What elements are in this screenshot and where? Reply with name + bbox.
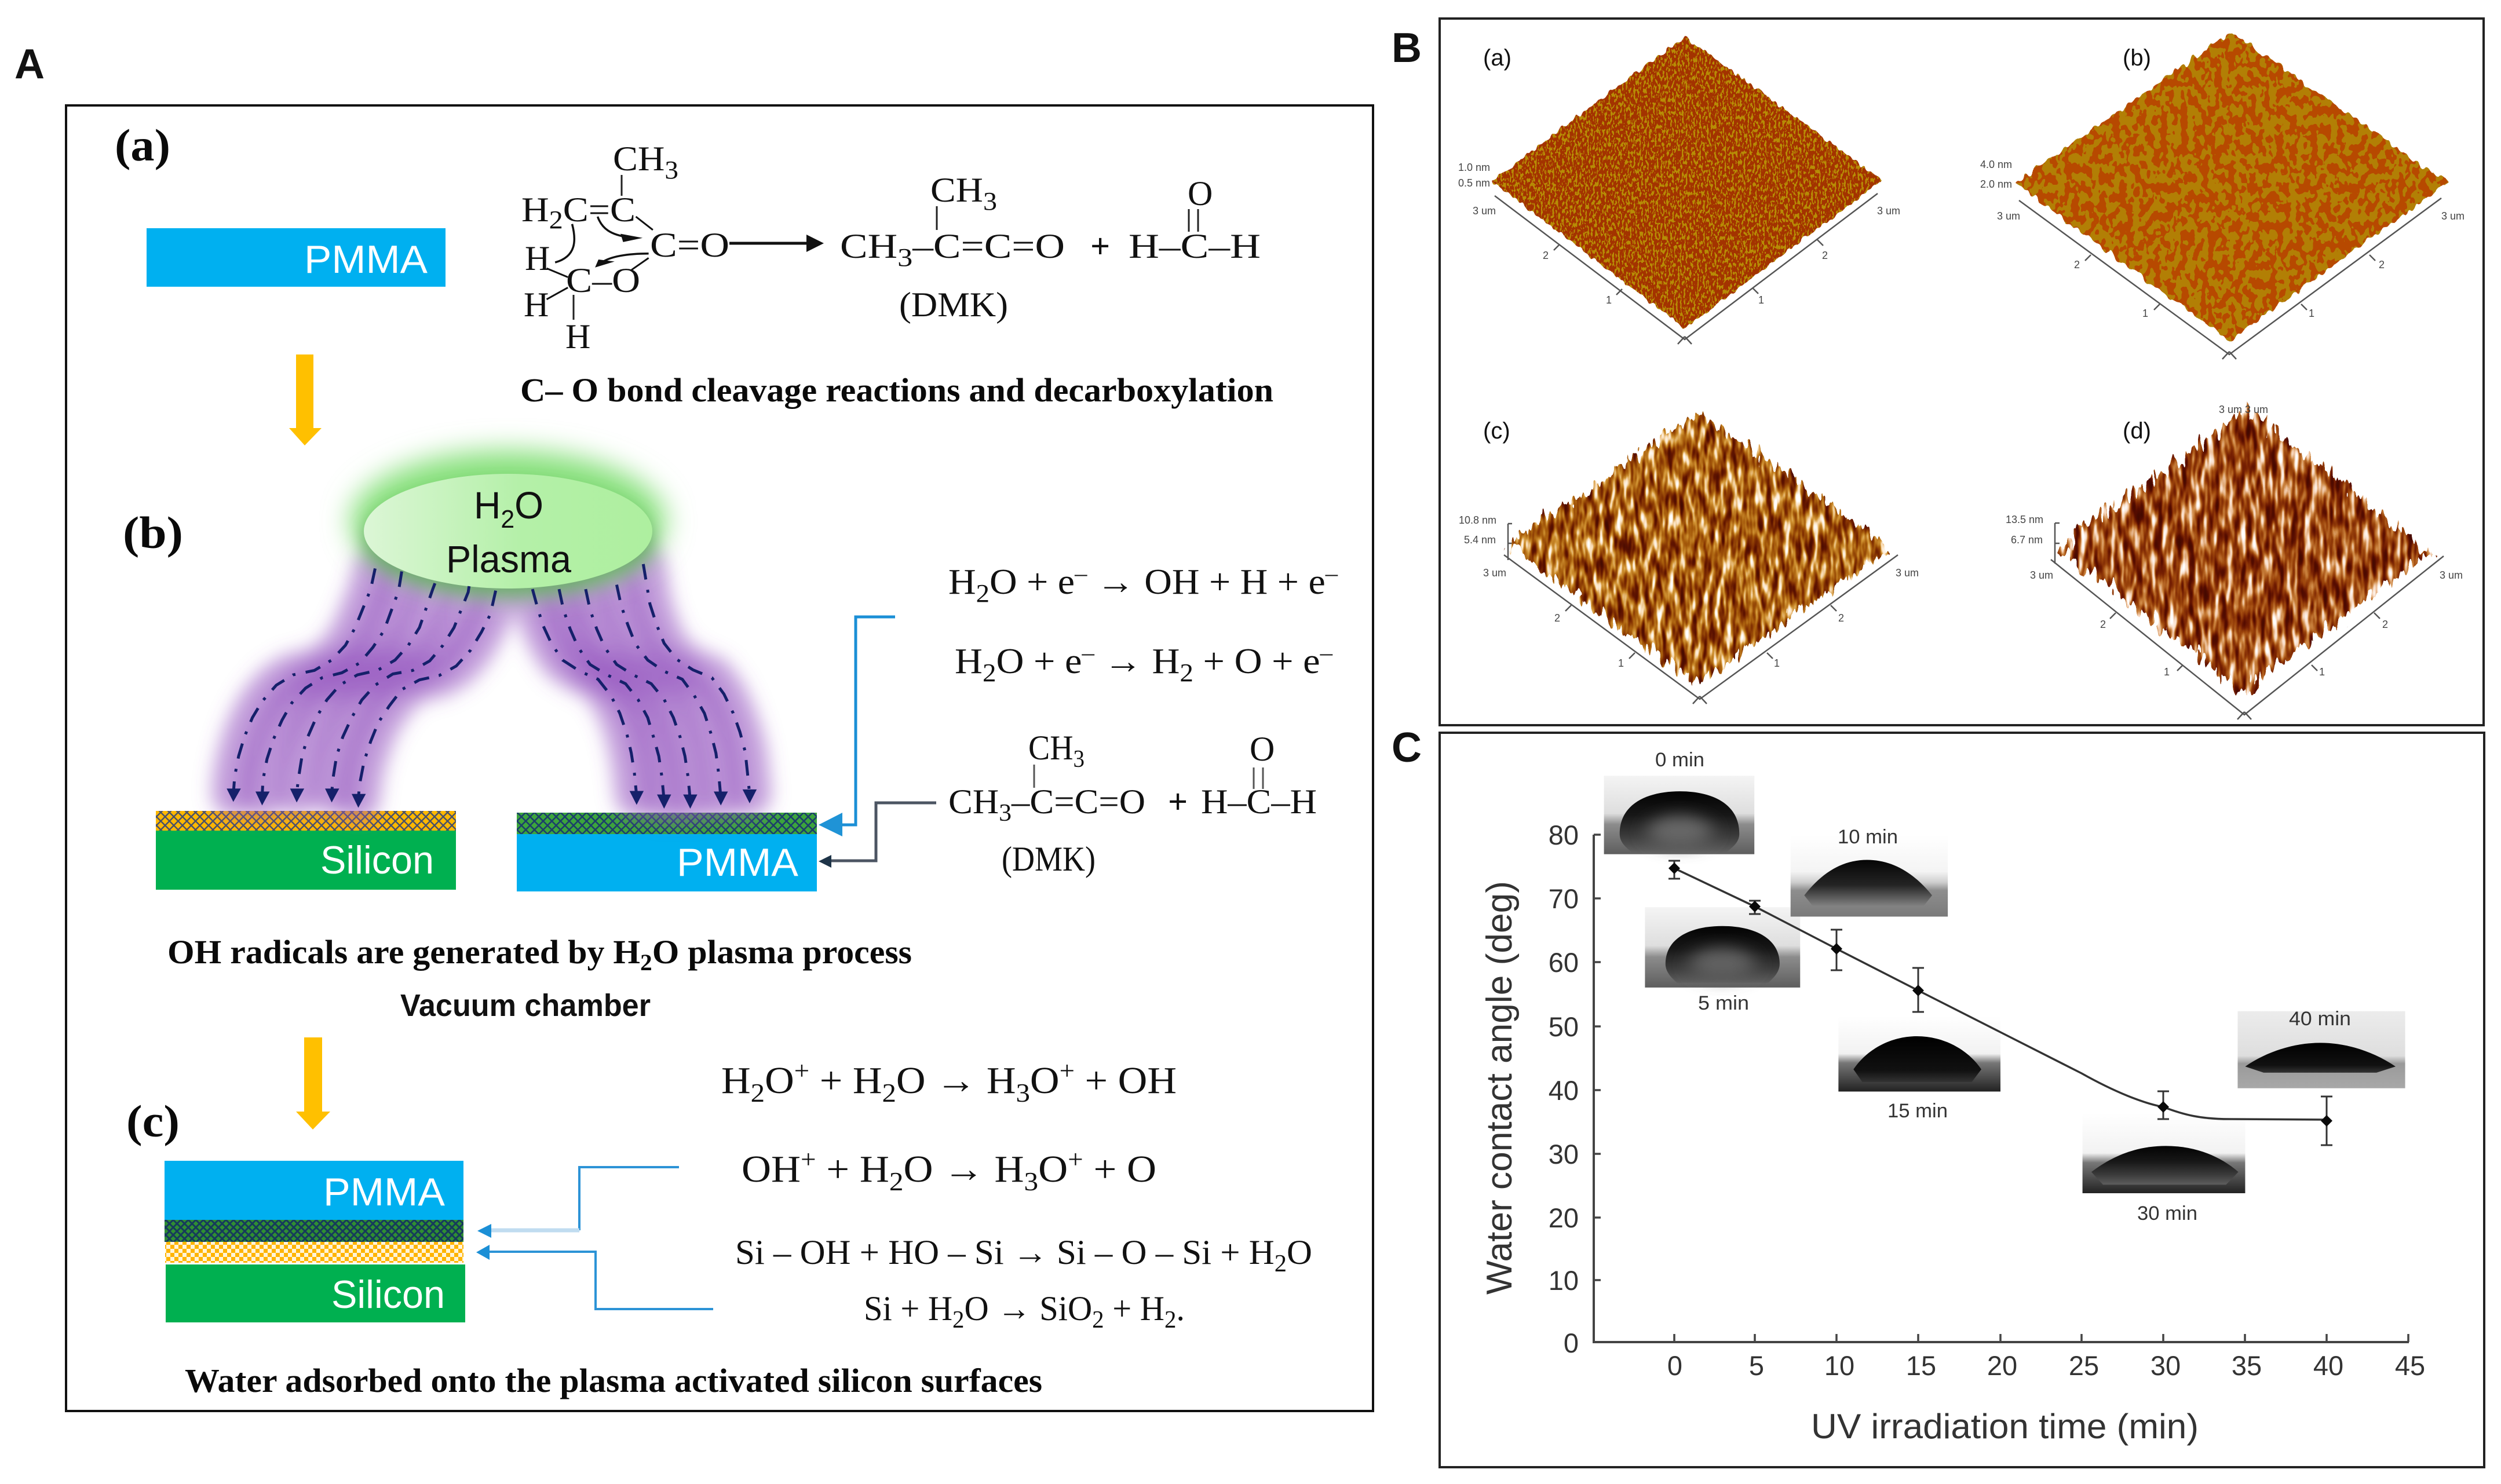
AFM image (b): 2 bbox=[2074, 259, 2080, 271]
reactant structure: C=C bbox=[563, 191, 636, 229]
reactant structure: C=O bbox=[650, 226, 729, 264]
product structure: DMK and formaldehyde bbox=[840, 171, 1261, 324]
equations: water dissociation: – bbox=[1325, 560, 1338, 586]
AFM image (b): 3 um bbox=[1997, 210, 2020, 222]
y-axis tick labels: 20 bbox=[1549, 1202, 1579, 1233]
panel A: PMMA plasma process bbox=[66, 105, 1373, 1411]
chart axes bbox=[1594, 835, 2409, 1342]
y-axis tick labels: 50 bbox=[1549, 1011, 1579, 1042]
AFM image (c) bbox=[1459, 412, 1919, 704]
panel B: AFM surfaces bbox=[1440, 19, 2484, 725]
equations: interface reactions: + bbox=[794, 1057, 809, 1085]
reactant structure: H bbox=[565, 317, 590, 356]
caption: water adsorption: Water adsorbed onto the plasma activated silicon surfaces bbox=[185, 1362, 1042, 1399]
y-axis tick labels: 40 bbox=[1549, 1075, 1579, 1106]
equations: water dissociation: H bbox=[948, 562, 974, 602]
AFM image (a): 3 um bbox=[1877, 205, 1900, 217]
x-axis tick labels: 35 bbox=[2232, 1350, 2262, 1381]
droplet time labels: 15 min bbox=[1887, 1100, 1948, 1122]
equations: interface reactions: O → SiO bbox=[964, 1289, 1092, 1328]
caption: OH radicals: OH radicals are generated by H bbox=[167, 933, 625, 971]
error bars bbox=[1668, 861, 2332, 1145]
equations: interface reactions: + bbox=[801, 1145, 816, 1174]
equations: water dissociation: – bbox=[1074, 560, 1087, 586]
equations: interface reactions: + H bbox=[1104, 1289, 1164, 1328]
AFM image (d): (d) bbox=[2123, 418, 2151, 444]
equations: interface reactions: 2 bbox=[889, 1167, 903, 1196]
reaction arrow bbox=[729, 235, 824, 252]
product structure: DMK and formaldehyde: CH bbox=[840, 227, 888, 265]
AFM image (b): 2 bbox=[2379, 259, 2385, 271]
equations: interface reactions: O → H bbox=[903, 1148, 1024, 1190]
x-axis title: UV irradiation time (min) bbox=[1811, 1407, 2199, 1446]
product structure: DMK and formaldehyde: 3 bbox=[983, 187, 997, 215]
arrow: connector to silicon interface bbox=[476, 1245, 713, 1309]
y-axis tick labels bbox=[1549, 820, 1579, 1358]
data curve bbox=[1674, 868, 2327, 1120]
caption: bond cleavage: C– O bond cleavage reactions and decarboxylation bbox=[520, 371, 1273, 409]
DMK structure, step b: 3 bbox=[999, 800, 1012, 827]
DMK structure, step b: –C=C=O bbox=[1011, 783, 1145, 821]
equations: interface reactions: 3 bbox=[1024, 1167, 1038, 1196]
arrow: connector to PMMA interface bbox=[477, 1167, 679, 1238]
AFM image (a): 2 bbox=[1822, 250, 1828, 261]
AFM image (d): 1 bbox=[2319, 666, 2325, 678]
AFM image (b): 4.0 nm bbox=[1980, 159, 2012, 170]
panel A label: A bbox=[14, 41, 45, 87]
equations: interface reactions: O bbox=[1030, 1059, 1060, 1102]
caption: OH radicals: 2 bbox=[640, 949, 652, 975]
arrow: blue connector to PMMA surface bbox=[819, 617, 895, 836]
arrow: step b to c bbox=[296, 1037, 330, 1130]
x-axis tick labels: 45 bbox=[2395, 1350, 2425, 1381]
equations: interface reactions: OH bbox=[742, 1148, 797, 1190]
AFM image (b): 3 um bbox=[2441, 210, 2465, 222]
droplet time labels: 0 min bbox=[1655, 749, 1704, 771]
panel A frame bbox=[66, 105, 1373, 1411]
droplet time labels bbox=[1655, 749, 2351, 1225]
y-axis tick labels: 10 bbox=[1549, 1265, 1579, 1296]
step (a) label: (a) bbox=[115, 120, 170, 170]
caption: vacuum chamber: Vacuum chamber bbox=[400, 988, 651, 1023]
panel B label: B bbox=[1392, 25, 1422, 71]
AFM image (c): 3 um bbox=[1896, 567, 1919, 579]
AFM image (a): 2 bbox=[1543, 250, 1549, 261]
equations: water dissociation: 2 bbox=[976, 579, 990, 608]
plasma ellipse with H2O label: H bbox=[474, 484, 502, 527]
equations: interface reactions: . bbox=[1176, 1289, 1185, 1328]
droplet time labels: 10 min bbox=[1838, 826, 1898, 848]
step (b) label: (b) bbox=[123, 507, 183, 558]
equations: water dissociation: + O + e bbox=[1193, 642, 1320, 681]
equations: interface reactions: Si – OH + HO – Si → Si – O – Si + H bbox=[735, 1233, 1267, 1271]
PMMA stack with hatched layer bbox=[517, 813, 817, 891]
plasma ellipse with H2O label bbox=[350, 451, 666, 595]
AFM image (b): 1 bbox=[2309, 308, 2314, 319]
droplet time labels: 30 min bbox=[2137, 1202, 2197, 1225]
equations: interface reactions: 2 bbox=[952, 1307, 964, 1333]
AFM image (a): 3 um bbox=[1473, 205, 1496, 217]
product structure: DMK and formaldehyde: 3 bbox=[897, 243, 912, 272]
PMMA stack with hatched layer: PMMA bbox=[677, 840, 799, 884]
AFM image (c): 1 bbox=[1618, 657, 1624, 669]
panel C label: C bbox=[1392, 725, 1422, 771]
step (c) label: (c) bbox=[126, 1096, 180, 1146]
DMK structure, step b: O bbox=[1250, 730, 1275, 768]
equations: interface reactions: 3 bbox=[1016, 1078, 1030, 1107]
bonded stack: PMMA on silicon bbox=[165, 1161, 465, 1322]
product structure: DMK and formaldehyde: + bbox=[1090, 227, 1110, 265]
y-axis tick labels: 70 bbox=[1549, 883, 1579, 914]
AFM image (c): 5.4 nm bbox=[1464, 534, 1496, 546]
AFM image (c): 3 um bbox=[1483, 567, 1506, 579]
data markers bbox=[1668, 862, 2332, 1127]
dash-dot radical flow arrows bbox=[227, 564, 757, 809]
equations: interface reactions: + H bbox=[809, 1059, 882, 1102]
x-axis tick labels: 15 bbox=[1906, 1350, 1936, 1381]
PMMA block, step a: PMMA bbox=[304, 237, 428, 282]
x-axis tick labels: 10 bbox=[1824, 1350, 1854, 1381]
arrow: step a to b bbox=[289, 354, 322, 445]
equations: water dissociation: O + e bbox=[990, 562, 1075, 602]
silicon stack with hatched layer bbox=[156, 811, 456, 890]
x-axis tick labels: 40 bbox=[2313, 1350, 2343, 1381]
equations: interface reactions: 2 bbox=[751, 1078, 765, 1107]
equations: interface reactions: H bbox=[721, 1059, 749, 1102]
reactant structure: CH bbox=[613, 140, 661, 178]
AFM image (b): (b) bbox=[2123, 45, 2151, 71]
x-axis tick labels: 30 bbox=[2151, 1350, 2181, 1381]
x-axis tick labels: 20 bbox=[1987, 1350, 2017, 1381]
AFM image (c): 10.8 nm bbox=[1459, 514, 1496, 526]
equations: interface reactions: + bbox=[1068, 1145, 1083, 1174]
AFM image (c): 1 bbox=[1774, 657, 1780, 669]
AFM image (d): 3 um bbox=[2440, 569, 2463, 581]
equations: interface reactions: O bbox=[765, 1059, 794, 1102]
equations: water dissociation: 2 bbox=[1180, 659, 1193, 687]
plasma ellipse with H2O label: 2 bbox=[501, 505, 514, 533]
caption: OH radicals: O plasma process bbox=[652, 933, 912, 971]
AFM image (c): 2 bbox=[1554, 612, 1560, 624]
product structure: DMK and formaldehyde: –C=C=O bbox=[912, 227, 1065, 265]
AFM image (d): 6.7 nm bbox=[2011, 534, 2043, 546]
equations: water dissociation bbox=[948, 560, 1338, 687]
product structure: DMK and formaldehyde: (DMK) bbox=[899, 286, 1008, 324]
plasma ellipse with H2O label: Plasma bbox=[446, 538, 571, 580]
equations: interface reactions: 2 bbox=[1164, 1307, 1176, 1333]
reactant structure: C–O bbox=[566, 261, 640, 299]
AFM image (b) bbox=[1980, 32, 2465, 359]
DMK structure, step b: (DMK) bbox=[1002, 840, 1096, 878]
y-axis tick labels: 0 bbox=[1564, 1328, 1579, 1358]
bonded stack: PMMA on silicon: Silicon bbox=[331, 1273, 445, 1317]
x-axis tick labels bbox=[1667, 1350, 2425, 1381]
AFM image (b): 2.0 nm bbox=[1980, 178, 2012, 190]
equations: interface reactions: 2 bbox=[1275, 1251, 1287, 1277]
y-axis title: Water contact angle (deg) bbox=[1480, 881, 1520, 1295]
equations: interface reactions bbox=[721, 1057, 1312, 1333]
equations: interface reactions: O bbox=[1038, 1148, 1068, 1190]
PMMA block, step a bbox=[147, 228, 446, 287]
equations: water dissociation: – bbox=[1320, 639, 1333, 666]
DMK structure, step b: 3 bbox=[1073, 746, 1085, 773]
equations: interface reactions: + OH bbox=[1075, 1059, 1177, 1102]
product structure: DMK and formaldehyde: H–C–H bbox=[1129, 227, 1261, 265]
AFM image (c): (c) bbox=[1483, 418, 1510, 444]
AFM image (a): (a) bbox=[1483, 45, 1511, 71]
arrow: dark connector from DMK bbox=[819, 803, 936, 868]
AFM image (d): 1 bbox=[2164, 666, 2170, 678]
equations: interface reactions: + H bbox=[816, 1148, 889, 1190]
panel C: water contact angle chart bbox=[1440, 733, 2484, 1467]
AFM image (d): 3 um 3 um bbox=[2219, 404, 2268, 415]
AFM image (d) bbox=[2006, 404, 2463, 719]
equations: water dissociation: H bbox=[955, 642, 981, 681]
equations: water dissociation: → OH + H + e bbox=[1087, 562, 1326, 602]
DMK structure, step b: H–C–H bbox=[1201, 783, 1317, 821]
reactant structure: 2 bbox=[549, 206, 563, 234]
x-axis tick labels: 0 bbox=[1667, 1350, 1682, 1381]
AFM image (a): 1 bbox=[1758, 294, 1764, 306]
plasma purple streams glow bbox=[233, 564, 750, 801]
droplet photos bbox=[1604, 776, 2405, 1193]
droplet time labels: 5 min bbox=[1698, 992, 1749, 1014]
DMK structure, step b: + bbox=[1168, 783, 1188, 821]
AFM image (a): 0.5 nm bbox=[1458, 177, 1490, 189]
bonded stack: PMMA on silicon: PMMA bbox=[323, 1170, 446, 1214]
equations: water dissociation: → H bbox=[1094, 642, 1180, 681]
equations: water dissociation: – bbox=[1081, 639, 1095, 666]
AFM image (d): 13.5 nm bbox=[2006, 514, 2043, 525]
equations: interface reactions: O bbox=[1287, 1233, 1312, 1271]
silicon stack with hatched layer: Silicon bbox=[320, 838, 434, 882]
y-axis tick labels: 60 bbox=[1549, 947, 1579, 978]
equations: interface reactions: 2 bbox=[882, 1078, 896, 1107]
product structure: DMK and formaldehyde: CH bbox=[930, 171, 979, 209]
y-axis tick labels: 80 bbox=[1549, 820, 1579, 850]
reactant structure: H bbox=[524, 286, 549, 324]
AFM image (a): 1 bbox=[1606, 294, 1612, 306]
equations: interface reactions: + bbox=[1060, 1057, 1075, 1085]
reactant structure: 3 bbox=[665, 156, 678, 184]
DMK structure, step b bbox=[948, 729, 1317, 878]
x-axis tick labels: 5 bbox=[1749, 1350, 1764, 1381]
AFM image (b): 1 bbox=[2142, 308, 2148, 319]
equations: water dissociation: O + e bbox=[996, 642, 1082, 681]
AFM image (d): 2 bbox=[2100, 619, 2106, 630]
equations: interface reactions: Si + H bbox=[864, 1289, 955, 1328]
droplet time labels: 40 min bbox=[2289, 1008, 2351, 1030]
reactant structure: H bbox=[521, 191, 546, 229]
equations: interface reactions: + O bbox=[1083, 1148, 1156, 1190]
AFM image (d): 2 bbox=[2382, 619, 2388, 630]
equations: interface reactions: O → H bbox=[896, 1059, 1016, 1102]
equations: water dissociation: 2 bbox=[983, 659, 996, 687]
AFM image (c): 2 bbox=[1838, 612, 1844, 624]
AFM image (d): 3 um bbox=[2030, 569, 2053, 581]
y-axis tick labels: 30 bbox=[1549, 1139, 1579, 1169]
equations: interface reactions: 2 bbox=[1092, 1307, 1104, 1333]
AFM image (a) bbox=[1458, 36, 1900, 344]
plasma ellipse with H2O label: O bbox=[514, 484, 543, 527]
panel B frame bbox=[1440, 19, 2484, 725]
panel C frame bbox=[1440, 733, 2484, 1467]
reactant structure: H bbox=[525, 239, 550, 277]
reactant structure bbox=[521, 140, 729, 356]
DMK structure, step b: CH bbox=[1028, 729, 1076, 767]
AFM image (a): 1.0 nm bbox=[1458, 162, 1490, 173]
DMK structure, step b: CH bbox=[948, 783, 996, 821]
x-axis tick labels: 25 bbox=[2069, 1350, 2099, 1381]
product structure: DMK and formaldehyde: O bbox=[1188, 174, 1213, 213]
